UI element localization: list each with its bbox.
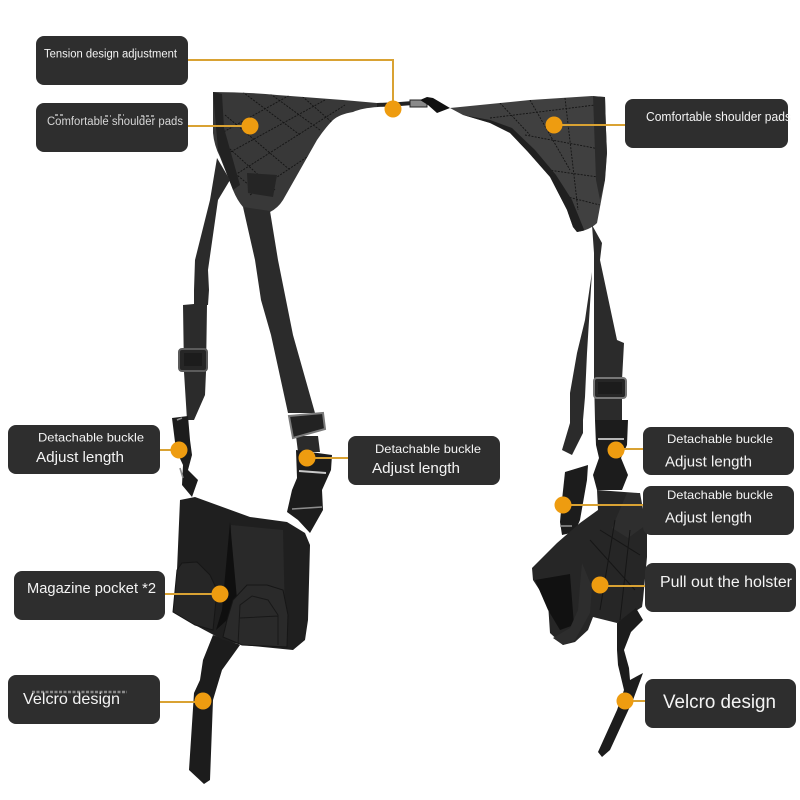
left slide buckle lower [289,413,325,452]
callout: magazine pocket [14,571,228,620]
callout: pull out the holster [592,563,796,612]
callout: comfortable shoulder pads right [546,99,791,148]
callout: detachable buckle right lower: Adjust length [665,510,752,526]
magazine pouch [173,497,310,650]
pocket flap right [223,585,288,647]
left wide strap [243,207,315,413]
callout: detachable buckle right lower [554,486,794,535]
callout: detachable buckle center: Adjust length [372,461,460,477]
callout: velcro design left: Velcro design [23,691,120,708]
callout: detachable buckle center: Detachable buckle [375,442,481,456]
right velcro tail [598,608,643,757]
callout: velcro design left [8,675,212,724]
product: right harness [450,96,647,757]
right thin strap [562,272,592,455]
callout: detachable buckle right upper [608,427,794,475]
callout: velcro design right [616,679,796,728]
center detachable buckle [287,450,332,533]
callout: tension design adjustment [36,36,402,118]
left velcro tail [189,635,240,784]
callout: detachable buckle center [298,436,500,485]
product: left harness [172,90,378,784]
left thin strap [183,158,230,420]
callout: detachable buckle left [8,425,188,474]
center tension buckle [377,97,450,113]
callout: comfortable shoulder pads right: Comfortable shoulder pads [646,110,791,124]
right slide buckle upper [594,378,626,398]
callout: detachable buckle right upper: Detachable buckle [667,432,773,446]
pocket flap left [173,562,217,630]
holster body [532,490,647,645]
left slide buckle upper [179,349,207,371]
left shoulder pad [213,90,378,212]
right side small buckle [560,465,588,535]
callout: velcro design right: Velcro design [663,692,776,713]
right detachable buckle [593,420,628,490]
callout: magazine pocket: Magazine pocket *2 [27,581,156,597]
right shoulder pad [450,96,607,232]
right wide strap [592,225,624,420]
callout: detachable buckle left: Detachable buckle [38,430,144,444]
callout: comfortable shoulder pads left: Comfortable shoulder pads [47,116,183,128]
callout: detachable buckle left: Adjust length [36,450,124,466]
left detachable buckle small [172,416,198,497]
callout: pull out the holster: Pull out the holster [660,574,792,591]
callout: comfortable shoulder pads left [36,103,258,152]
callout: detachable buckle right upper: Adjust length [665,454,752,470]
callout: detachable buckle right lower: Detachable buckle [667,488,773,502]
callout: tension design adjustment: Tension design adjustment [44,48,178,60]
